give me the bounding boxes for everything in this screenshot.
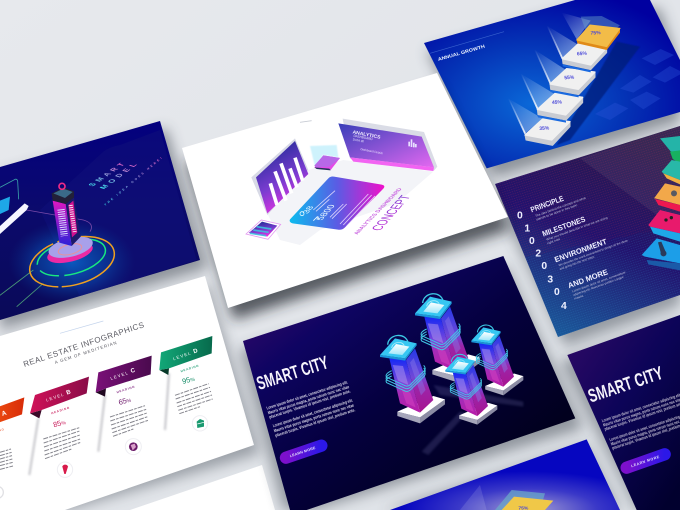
ring: orange	[28, 236, 116, 288]
icon: globe	[125, 439, 141, 455]
title: analytics dashboard concept: ANALYTICS DASHBOARD	[353, 188, 405, 235]
rotating base	[47, 236, 93, 264]
number column	[517, 210, 567, 312]
left screen fragment	[0, 179, 29, 234]
step 55%: 55%	[564, 75, 575, 81]
card: level C: LEVEL C	[110, 367, 137, 382]
body copy	[601, 392, 680, 451]
card: level A: A	[1, 410, 8, 418]
ring: green	[36, 238, 106, 276]
body copy: placerat turpis. Vivamus id ipsum nisl, pretium ante.	[274, 407, 356, 438]
body copy	[266, 379, 356, 438]
analytics panel: ANALYTICS	[352, 129, 381, 140]
card: level C: HEADING	[116, 385, 136, 394]
number column: 4	[561, 301, 567, 312]
column separators	[29, 373, 169, 475]
cyan stats panel: 38	[300, 205, 316, 214]
card: level B: HEADING	[51, 406, 70, 415]
card: level C: 65%	[117, 395, 133, 407]
panel: smart city slide, centre	[240, 256, 583, 510]
title: A GEM OF MEDITERIAN	[54, 340, 117, 365]
step 45%	[537, 93, 583, 123]
analytics panel: Dashboard Details	[360, 147, 384, 155]
heading: smart city: SMART CITY	[254, 351, 331, 394]
icon: small glowing tile	[310, 145, 340, 170]
heading: annual growth: ANNUAL GROWTH	[437, 44, 486, 62]
item: principle: stands to be done in this topic	[536, 203, 578, 222]
heading: annual growth	[430, 32, 504, 62]
tower: right	[471, 325, 523, 395]
body copy: Mauris vitae purus magna, porta rutrum nunc nec vitae	[267, 384, 350, 415]
title: REAL ESTATE INFOGRAPHICS	[22, 320, 145, 369]
cyan stats panel	[290, 177, 384, 230]
card: level D: 95%	[181, 374, 196, 386]
panel: real estate infographics slide	[0, 276, 260, 510]
item: and more: Lorem ipsum dolor sit amet, consectetuer	[572, 270, 626, 293]
body copy: Mauris vitae purus magna, porta rutrum nunc nec vitae	[273, 402, 355, 433]
step 65%: 65%	[577, 51, 588, 57]
icon: stacked layers tile	[246, 220, 281, 239]
number column: 0	[554, 287, 560, 298]
panel: blue step slide, bottom	[383, 439, 620, 510]
icon: card	[192, 416, 208, 431]
item: and more: AND MORE	[567, 267, 609, 290]
title: smart model: THE IDEA GOES HERE!	[103, 156, 163, 207]
number column: 1	[524, 224, 530, 235]
button: learn more: LEARN MORE	[289, 446, 316, 458]
tower: back	[415, 294, 480, 382]
icon: folded colour ribbon	[642, 136, 680, 270]
light streaks	[422, 385, 523, 455]
body copy: Lorem ipsum dolor sit amet, consectetur adipiscing elit.	[266, 379, 348, 411]
panel: principle and milestones slide	[493, 126, 680, 347]
step 75% gold	[577, 16, 620, 50]
bar chart panel	[251, 138, 308, 215]
step 35%: 35%	[539, 125, 550, 132]
card: level B: LEVEL B	[45, 389, 73, 404]
card: level D	[159, 336, 213, 431]
icon: pin	[57, 462, 73, 477]
number column: 0	[517, 210, 523, 221]
number column: 3	[547, 274, 553, 285]
dark stair shadow	[557, 42, 640, 145]
card: level B: 85%	[52, 417, 67, 429]
title: smart model: SMART	[86, 162, 127, 187]
tower	[52, 183, 81, 246]
analytics panel: DASHBOARD	[353, 134, 373, 141]
panel: annual growth slide	[424, 0, 680, 178]
body copy: Lorem ipsum dolor sit amet, consectetur adipiscing elit.	[272, 398, 354, 428]
panel: blank white slide fragment	[130, 465, 275, 510]
item: environment: and going into the next steps	[559, 254, 595, 271]
panel: analytics dashboard concept slide	[182, 73, 510, 320]
title: analytics dashboard concept: CONCEPT	[368, 194, 414, 231]
panel: smart city slide, right	[560, 315, 680, 510]
title: smart model: MODEL	[97, 162, 139, 190]
item: milestones: MILESTONES	[541, 215, 587, 239]
card: level A	[0, 397, 24, 498]
item: environment: We describe the world environment to design all the ideas	[558, 238, 629, 267]
item: principle: PRINCIPLE	[529, 194, 565, 214]
item: and more: adipiscing elit. Maecenas porttitor congue	[573, 275, 624, 297]
cyan stats panel: 5800	[314, 204, 337, 221]
card: level D: LEVEL D	[172, 348, 200, 362]
number column: 2	[535, 248, 541, 259]
button: learn more: LEARN MORE	[631, 455, 660, 468]
item: and more	[569, 269, 626, 300]
card: level B	[30, 377, 89, 477]
item: milestones: What you should describe in what we are doing	[546, 215, 608, 242]
number column: 0	[541, 261, 547, 272]
card: level C	[96, 356, 152, 455]
isometric floor	[267, 160, 433, 245]
item: environment: ENVIRONMENT	[553, 237, 608, 264]
step 55%	[550, 69, 595, 97]
step 35%	[525, 118, 570, 145]
number column: 0	[529, 236, 535, 247]
analytics panel	[338, 119, 437, 171]
analytics panel: DATA 30	[352, 137, 365, 144]
card: level D: HEADING	[180, 364, 200, 373]
step 75% gold: 75%	[590, 30, 601, 37]
item: principle: The idea behind the concept and what	[535, 196, 586, 218]
step trails	[509, 13, 591, 133]
step block: gold	[495, 490, 553, 510]
tower: front left	[380, 335, 445, 423]
tower: front small	[445, 354, 497, 425]
item: and more: massa.	[574, 293, 585, 301]
item: milestones: right now	[547, 237, 561, 245]
panel: smart model slide	[0, 121, 208, 330]
circuit lines	[0, 210, 91, 307]
faint diamond tiles	[595, 49, 680, 120]
step 65%	[562, 44, 607, 72]
body copy: placerat turpis. Vivamus id ipsum nisl, pretium ante.	[268, 388, 351, 420]
step 45%: 45%	[552, 99, 563, 106]
